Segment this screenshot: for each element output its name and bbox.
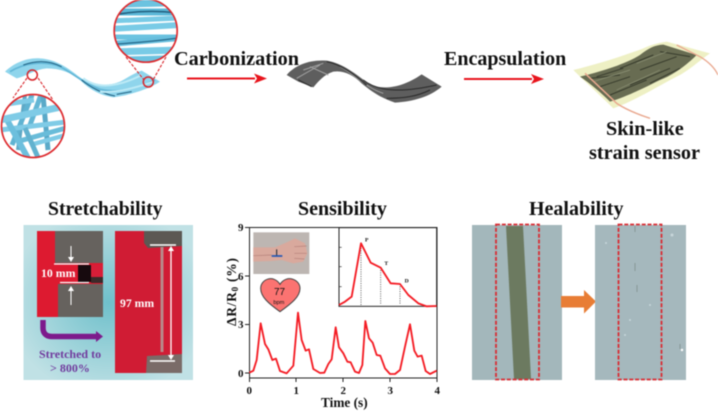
inset: single pulse waveform: [339, 228, 437, 306]
heading: Healability: Healability: [529, 198, 623, 220]
y axis title: (%): [224, 258, 239, 286]
callout: zoom lines and markers on ribbon: [13, 57, 166, 100]
heading: Encapsulation: Encapsulation: [444, 48, 566, 70]
photo: 10 mm gauge: 10 mm: [41, 266, 76, 280]
label: Skin-like strain sensor: [589, 118, 700, 164]
x tick labels: 3: [388, 385, 394, 397]
photo: 97 mm stretched sample: [115, 231, 182, 373]
photo: 10 mm gauge: [37, 231, 103, 317]
photo: 97 mm stretched sample: 97 mm: [120, 297, 154, 310]
label: Skin-like strain sensor: Skin-like: [606, 118, 684, 140]
photo: wrist with sensor: [253, 232, 309, 274]
heading: Sensibility: Sensibility: [298, 198, 387, 220]
photo: damaged strip before healing: [472, 224, 562, 380]
icon: blue fiber ribbon: [5, 58, 160, 97]
panel: stretchability: [24, 225, 193, 380]
icon: carbonized ribbon: [287, 60, 442, 103]
photo: healed surface: [595, 224, 686, 380]
x axis title: Time (s): [321, 395, 368, 410]
label: Stretched to > 800%: [39, 347, 101, 375]
y axis title: ΔR/R: [224, 292, 239, 326]
chart: sensibility line chart: [224, 222, 440, 410]
inset: single pulse waveform: T: [384, 261, 388, 267]
icon: skin-like strain sensor: [573, 42, 718, 118]
y tick labels: 3: [238, 319, 244, 331]
icon: random fibers magnified circle: [0, 92, 70, 162]
arrow: carbonization: [187, 74, 267, 84]
x tick labels: 2: [340, 385, 346, 397]
icon: aligned fibers magnified circle: [110, 0, 180, 62]
arrow: stretch direction: [43, 320, 103, 342]
x tick labels: [246, 385, 440, 397]
arrow: healing: [561, 290, 596, 314]
y tick labels: 0: [238, 368, 244, 380]
x tick labels: 1: [294, 385, 299, 397]
y tick labels: 6: [238, 271, 244, 283]
label: Stretched to > 800%: > 800%: [50, 361, 90, 375]
inset: single pulse waveform: P: [365, 237, 369, 243]
heading: Carbonization: Carbonization: [174, 48, 299, 70]
axis ticks: [245, 228, 437, 382]
x tick labels: 0: [246, 385, 252, 397]
arrow: encapsulation: [464, 74, 544, 84]
pulse trace: [249, 313, 437, 374]
x tick labels: 4: [434, 385, 440, 397]
icon: heart 77 bpm: bpm: [273, 300, 285, 306]
icon: heart 77 bpm: 77: [274, 287, 286, 298]
y tick labels: 9: [238, 222, 244, 234]
y axis title: 0: [230, 286, 240, 291]
label: Stretched to > 800%: Stretched to: [39, 347, 101, 361]
heading: Stretchability: Stretchability: [48, 198, 163, 220]
icon: heart 77 bpm: [261, 279, 300, 312]
label: Skin-like strain sensor: strain sensor: [589, 142, 700, 164]
inset: single pulse waveform: D: [405, 278, 409, 284]
y tick labels: [238, 222, 244, 380]
